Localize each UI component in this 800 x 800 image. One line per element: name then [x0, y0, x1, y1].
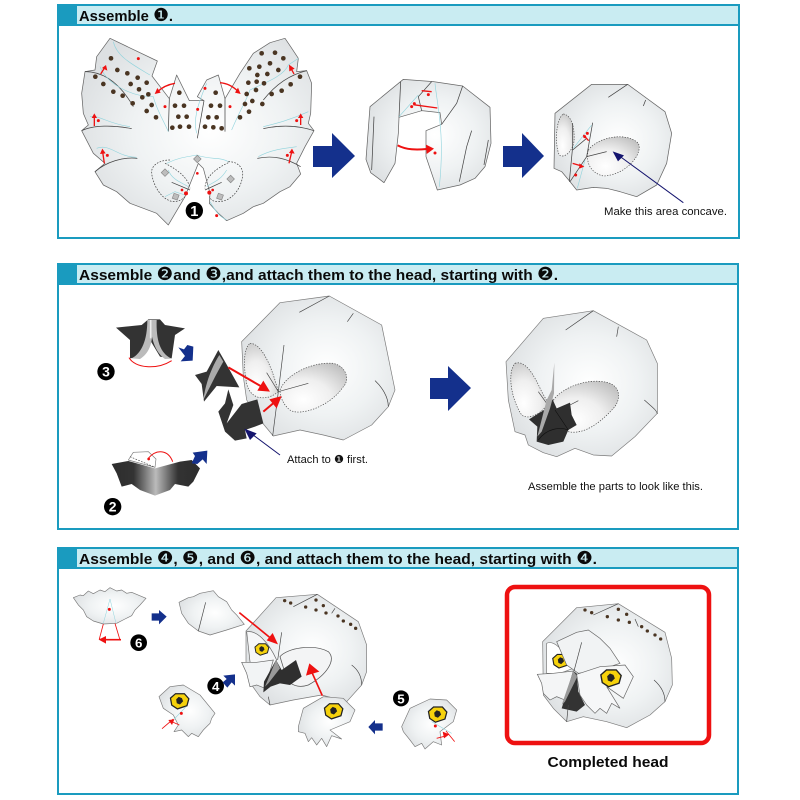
- arrows: red and blue guides: [178, 345, 282, 464]
- part 6 flat: [73, 588, 146, 644]
- heading: panel 2: Assemble ❷and ❸,and attach them to the head, starting with ❷.: [79, 264, 558, 285]
- arrow: part 4: [223, 674, 235, 688]
- part 6 folded: [179, 591, 244, 635]
- badge 2: [104, 498, 121, 515]
- part 3 folded: [195, 350, 239, 402]
- figure: head with concave area: [554, 84, 683, 203]
- part 2 folded: [218, 389, 263, 441]
- figure: flat part 1 with folds: [82, 38, 314, 225]
- red arrows into head: [239, 613, 322, 696]
- note: assemble the parts: Assemble the parts to look like this.: [528, 481, 703, 493]
- heading: panel 1: Assemble ❶.: [79, 5, 173, 26]
- badge 4: [207, 678, 224, 694]
- part 3 black flat: [116, 319, 185, 367]
- part 5 near head: [298, 697, 355, 747]
- badge 1: [186, 202, 203, 220]
- badge 5: 5: [397, 691, 405, 706]
- arrow: step 2 to 3: [503, 133, 544, 178]
- badge 6: 6: [135, 636, 142, 651]
- arrow: part 5: [368, 720, 383, 734]
- arrow: part 6 to fold: [152, 610, 167, 624]
- figure: completed head: [537, 604, 672, 728]
- part 2 flat with flap: [112, 452, 200, 496]
- head outline with eye sockets: [242, 296, 395, 440]
- note: attach to 1 first: Attach to ❶ first.: [287, 454, 368, 466]
- heading: panel 3: Assemble ❹, ❺, and ❻, and attach them to the head, starting with ❹.: [79, 548, 597, 569]
- callout: completed head frame: [507, 587, 709, 743]
- panel 2: assemble parts 2 and 3: [58, 264, 738, 529]
- label: completed head: Completed head: [548, 755, 668, 771]
- arrow: step 1 to 2: [313, 133, 355, 178]
- badge 6: [130, 634, 147, 651]
- figure: large blue arrow and assembled head: [430, 311, 657, 457]
- figure: part 5 flat with badge: [393, 690, 457, 749]
- badge 3: 3: [102, 364, 110, 380]
- panel 3: assemble parts 4, 5 and 6: [58, 548, 738, 794]
- panel 1: assemble part 1: [58, 5, 739, 238]
- badge 2: 2: [109, 499, 117, 515]
- badge 4: 4: [212, 679, 220, 694]
- figure: part 1 folded: [366, 79, 491, 190]
- figure: parts 4, 5, 6 joining head: [73, 588, 383, 747]
- heading: panel 1: [58, 5, 739, 26]
- part 4 flat: [159, 685, 215, 737]
- head with parts attached: [242, 594, 367, 705]
- note: make this area concave: Make this area concave.: [604, 206, 727, 218]
- badge 3: [97, 363, 115, 380]
- figure: parts 3 and 2 joining head: [97, 296, 395, 515]
- badge 1: 1: [190, 204, 198, 220]
